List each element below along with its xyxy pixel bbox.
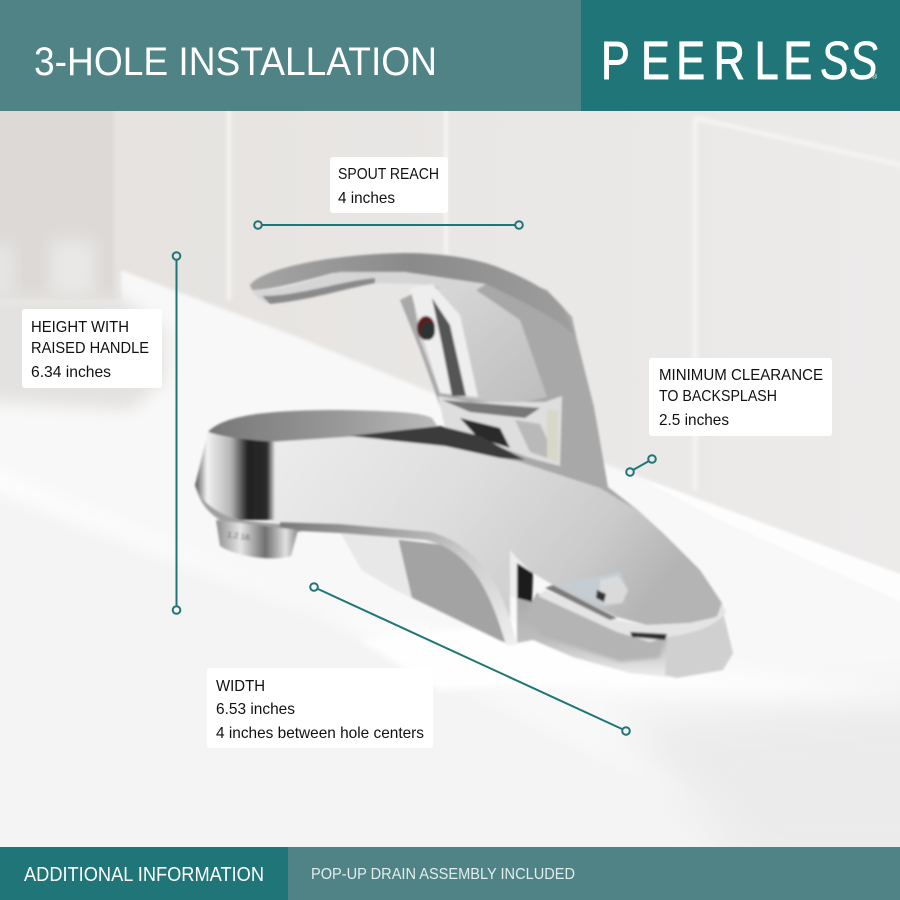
deck skirt right end xyxy=(517,593,733,678)
header left panel xyxy=(0,0,581,111)
callout: spout reach xyxy=(330,157,448,213)
title: 3-HOLE INSTALLATION xyxy=(34,40,437,84)
lift rod xyxy=(553,572,628,607)
footer bar xyxy=(0,847,900,900)
faucet rear pedestal xyxy=(341,533,511,645)
header bar xyxy=(0,0,900,111)
faucet photo illustration: 1.2 18. xyxy=(227,530,252,542)
faucet collar chrome xyxy=(438,396,562,466)
callout: width: 4 inches between hole centers xyxy=(216,725,424,742)
faucet lever top xyxy=(250,253,574,335)
callout: minimum clearance xyxy=(649,358,832,436)
spout top surface xyxy=(208,410,470,446)
callout: spout reach: SPOUT REACH xyxy=(338,166,439,183)
callout: height with raised handle: 6.34 inches xyxy=(31,364,111,381)
footer left panel xyxy=(0,847,288,900)
towel and shadow under bottle xyxy=(0,295,165,410)
callout: spout reach: 4 inches xyxy=(338,190,395,207)
footer text: POP-UP DRAIN ASSEMBLY INCLUDED xyxy=(311,866,575,883)
footer right panel xyxy=(288,847,900,900)
logo: Peerless: ® xyxy=(872,73,878,81)
blurred bottle xyxy=(0,95,114,310)
callout: height with raised handle: HEIGHT WITH xyxy=(31,319,129,336)
aerator xyxy=(216,520,298,558)
handle slot xyxy=(517,563,533,602)
header right panel xyxy=(581,0,900,111)
skirt chrome rim xyxy=(538,590,726,642)
faucet photo illustration xyxy=(195,253,733,678)
callout: minimum clearance: 2.5 inches xyxy=(659,412,729,429)
callout: width: WIDTH xyxy=(216,678,265,695)
hot cold indicator xyxy=(417,316,435,340)
callout: width xyxy=(207,668,433,748)
footer heading: ADDITIONAL INFORMATION xyxy=(24,864,264,886)
dimension line: spout reach xyxy=(254,221,523,229)
sink basin shading xyxy=(0,470,800,860)
callout: height with raised handle: RAISED HANDLE xyxy=(31,340,149,357)
spout arc edge xyxy=(280,522,517,645)
callout: minimum clearance: TO BACKSPLASH xyxy=(659,388,777,405)
lever underside chrome xyxy=(252,272,486,304)
callout: minimum clearance: MINIMUM CLEARANCE xyxy=(659,367,823,384)
dimension line: height xyxy=(173,252,180,614)
logo: Peerless: PEERLE xyxy=(601,32,812,91)
spout body front xyxy=(270,436,722,640)
faucet handle cap xyxy=(412,286,547,405)
callout: height with raised handle xyxy=(22,309,162,388)
dimension line: clearance xyxy=(626,455,656,476)
counter top xyxy=(0,270,900,880)
spout nose xyxy=(195,432,275,520)
logo: Peerless: SS xyxy=(820,32,878,91)
callout: width: 6.53 inches xyxy=(216,701,295,718)
faucet cap rear body xyxy=(400,263,640,512)
dimension line: width xyxy=(310,583,630,735)
